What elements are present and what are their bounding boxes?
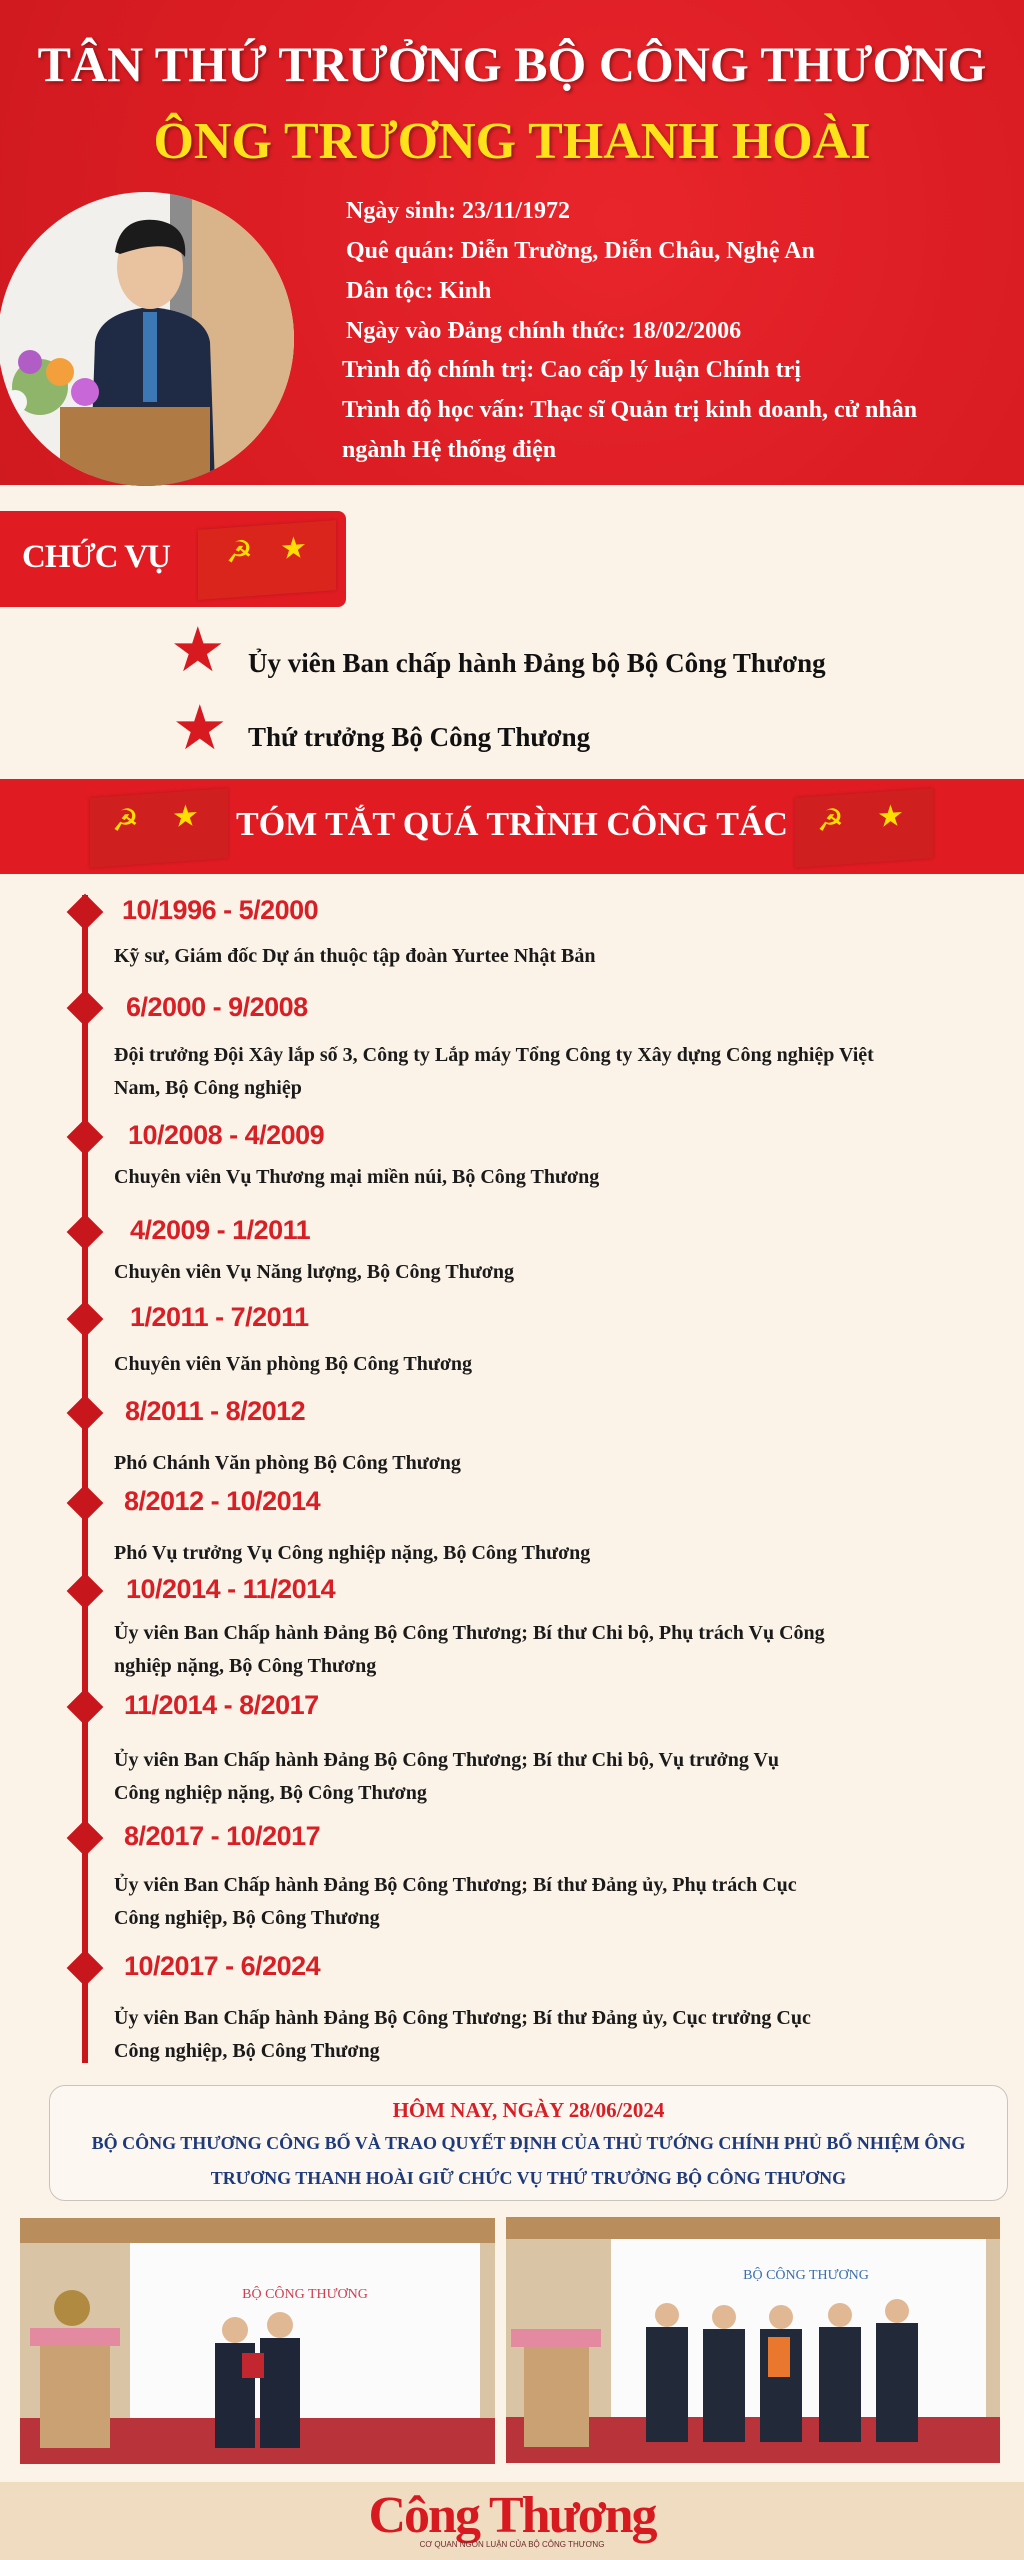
title line 2: ÔNG TRƯƠNG THANH HOÀI: [153, 113, 870, 170]
header panel: ngành Hệ thống điện: [342, 437, 556, 463]
icon: flag right: ☭: [817, 803, 844, 838]
icon: flag right: [795, 788, 933, 868]
announcement callout: BỘ CÔNG THƯƠNG CÔNG BỐ VÀ TRAO QUYẾT ĐỊNH CỦA THỦ TƯỚNG CHÍNH PHỦ BỔ NHIỆM ÔNG: [92, 2133, 965, 2153]
text: 10/2008 - 4/2009: [128, 1120, 324, 1150]
icon: flag left: [90, 788, 228, 868]
icon: flag right: ★: [877, 799, 904, 834]
footer logo: [0, 2482, 1024, 2560]
icon: flag left: ☭: [112, 803, 139, 838]
header panel: Trình độ chính trị: Cao cấp lý luận Chính trị: [342, 357, 801, 383]
text: Chuyên viên Văn phòng Bộ Công Thương: [114, 1353, 472, 1375]
footer logo: CƠ QUAN NGÔN LUẬN CỦA BỘ CÔNG THƯƠNG: [420, 2540, 604, 2549]
header panel: Quê quán: Diễn Trường, Diễn Châu, Nghệ An: [346, 238, 815, 264]
info text block: [342, 198, 917, 463]
text: Công nghiệp, Bộ Công Thương: [114, 1907, 380, 1929]
text: 6/2000 - 9/2008: [126, 992, 308, 1022]
icon: flag left: ★: [172, 799, 199, 834]
text: Phó Chánh Văn phòng Bộ Công Thương: [114, 1452, 461, 1474]
icon: flag: ★: [280, 531, 307, 566]
text: Nam, Bộ Công nghiệp: [114, 1077, 302, 1099]
text: Công nghiệp nặng, Bộ Công Thương: [114, 1782, 427, 1804]
portrait photo: [0, 192, 294, 486]
announcement callout: HÔM NAY, NGÀY 28/06/2024: [393, 2098, 664, 2122]
section heading: chức vụ: [0, 511, 346, 607]
text: Chuyên viên Vụ Năng lượng, Bộ Công Thương: [114, 1261, 514, 1283]
photo: right: BỘ CÔNG THƯƠNG: [743, 2266, 869, 2283]
header panel: Ngày sinh: 23/11/1972: [346, 198, 570, 224]
position items: ★: [172, 695, 228, 763]
text: Ủy viên Ban Chấp hành Đảng Bộ Công Thương; Bí thư Chi bộ, Phụ trách Vụ Công: [114, 1622, 825, 1644]
text: Kỹ sư, Giám đốc Dự án thuộc tập đoàn Yurtee Nhật Bản: [114, 945, 595, 967]
text: 10/1996 - 5/2000: [122, 895, 318, 925]
position items: ★: [170, 617, 226, 685]
photo: left: BỘ CÔNG THƯƠNG: [242, 2285, 368, 2302]
text: 8/2017 - 10/2017: [124, 1821, 320, 1851]
timeline: [82, 895, 88, 2063]
text: Công nghiệp, Bộ Công Thương: [114, 2040, 380, 2062]
photo: left: [20, 2218, 495, 2464]
header panel: Dân tộc: Kinh: [346, 278, 491, 304]
text: Chuyên viên Vụ Thương mại miền núi, Bộ Công Thương: [114, 1166, 599, 1188]
text: Đội trưởng Đội Xây lắp số 3, Công ty Lắp máy Tổng Công ty Xây dựng Công nghiệp Việt: [114, 1044, 874, 1066]
header panel: Trình độ học vấn: Thạc sĩ Quản trị kinh doanh, cử nhân: [342, 397, 917, 423]
footer logo: Công Thương: [368, 2487, 656, 2544]
section heading band: tóm tắt: [0, 779, 1024, 874]
text: nghiệp nặng, Bộ Công Thương: [114, 1655, 376, 1677]
title line 1: TÂN THỨ TRƯỞNG BỘ CÔNG THƯƠNG: [38, 36, 986, 92]
text: 10/2014 - 11/2014: [126, 1574, 335, 1604]
text: 4/2009 - 1/2011: [130, 1215, 310, 1245]
position items: Ủy viên Ban chấp hành Đảng bộ Bộ Công Thương: [248, 648, 826, 678]
position items: Thứ trưởng Bộ Công Thương: [248, 722, 590, 752]
announcement callout: TRƯƠNG THANH HOÀI GIỮ CHỨC VỤ THỨ TRƯỞNG BỘ CÔNG THƯƠNG: [211, 2168, 846, 2188]
text: Ủy viên Ban Chấp hành Đảng Bộ Công Thương; Bí thư Đảng ủy, Cục trưởng Cục: [114, 2007, 811, 2029]
text: 10/2017 - 6/2024: [124, 1951, 320, 1981]
section heading: chức vụ: CHỨC VỤ: [22, 539, 170, 575]
header panel: [0, 0, 1024, 485]
section heading band: tóm tắt: TÓM TẮT QUÁ TRÌNH CÔNG TÁC: [236, 806, 788, 843]
header panel: Ngày vào Đảng chính thức: 18/02/2006: [346, 318, 741, 344]
photo: right: [506, 2217, 1000, 2463]
text: Ủy viên Ban Chấp hành Đảng Bộ Công Thương; Bí thư Đảng ủy, Phụ trách Cục: [114, 1874, 797, 1896]
text: Ủy viên Ban Chấp hành Đảng Bộ Công Thương; Bí thư Chi bộ, Vụ trưởng Vụ: [114, 1749, 779, 1771]
text: 11/2014 - 8/2017: [124, 1690, 319, 1720]
text: 8/2011 - 8/2012: [125, 1396, 305, 1426]
text: Phó Vụ trưởng Vụ Công nghiệp nặng, Bộ Công Thương: [114, 1542, 590, 1564]
text: 1/2011 - 7/2011: [130, 1302, 309, 1332]
position items: [170, 617, 826, 763]
announcement callout: [49, 2085, 1008, 2201]
text: 8/2012 - 10/2014: [124, 1486, 320, 1516]
icon: flag: ☭: [226, 535, 253, 570]
icon: flag: [198, 520, 336, 600]
